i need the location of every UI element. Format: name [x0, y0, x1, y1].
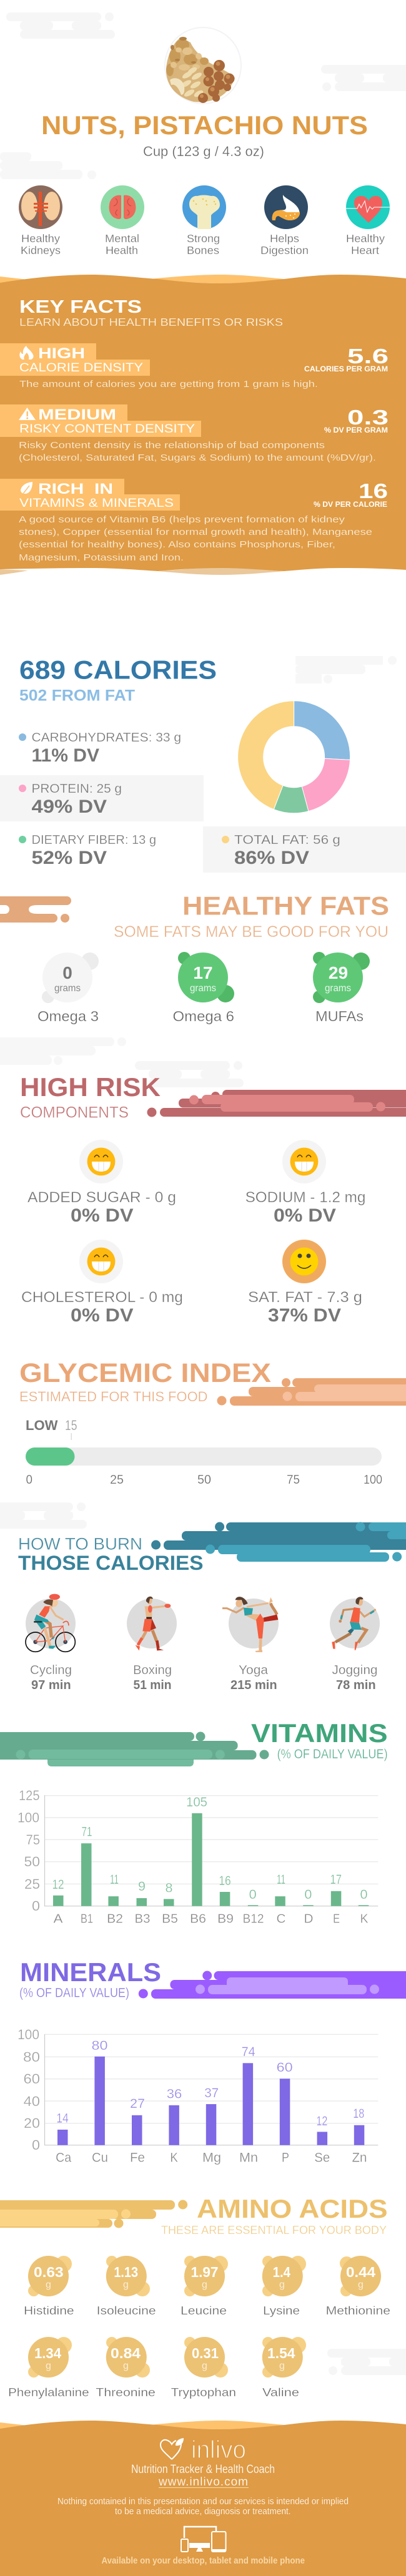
item: sodium: 0% DV — [274, 1205, 336, 1226]
amino: phenylalanine: g — [46, 2361, 51, 2371]
panel: footer — [0, 2421, 406, 2576]
benefit labels: Health — [106, 244, 138, 257]
glycemic level — [26, 1418, 77, 1440]
benefit labels — [21, 232, 385, 257]
vitamins bar chart: 11 — [277, 1873, 285, 1887]
benefit labels: Strong — [187, 232, 220, 245]
minerals bar chart: 37 — [204, 2086, 219, 2100]
amino: histidine: Histidine — [24, 2304, 74, 2317]
healthy fats heading: HEALTHY FATS — [182, 891, 389, 921]
fact: medium risky content density: (Cholesterol, Saturated Fat, Sugars & Sodium) to the amount (%DV/gr). — [19, 453, 376, 463]
minerals bar chart: 40 — [24, 2094, 40, 2109]
vitamins bar chart: K — [360, 1912, 369, 1926]
stat: omega 3: grams — [54, 983, 81, 994]
amino: tryptophan: Tryptophan — [171, 2386, 236, 2399]
fact: high calorie density: CALORIES PER GRAM — [304, 365, 388, 373]
vitamins bar chart: C — [276, 1912, 286, 1926]
benefit labels: Helps — [270, 232, 299, 245]
amino: leucine: g — [202, 2280, 207, 2290]
benefit labels: Bones — [187, 244, 219, 257]
panel: burn calories — [18, 1522, 406, 1692]
amino: threonine — [96, 2337, 156, 2399]
calories from fat: 502 FROM FAT — [19, 687, 135, 705]
vitamins bar chart: B5 — [162, 1912, 178, 1926]
vitamins bar chart: B12 — [242, 1912, 264, 1926]
disclaimer — [57, 2496, 349, 2517]
amino: threonine: g — [123, 2361, 129, 2371]
amino: tryptophan: g — [202, 2361, 207, 2371]
fact: medium risky content density — [0, 404, 389, 463]
vitamins bar chart: 100 — [17, 1810, 39, 1825]
amino: isoleucine: 1.13 — [114, 2264, 138, 2280]
icon: bone — [182, 185, 226, 229]
amino: tryptophan: 0.31 — [192, 2345, 219, 2361]
amino: methionine: Methionine — [326, 2304, 390, 2317]
activity labels: Boxing — [133, 1663, 172, 1677]
icon: stomach — [264, 185, 308, 229]
amino: valine: g — [279, 2361, 285, 2371]
calories heading: 689 CALORIES — [19, 655, 217, 684]
amino: methionine — [326, 2256, 390, 2317]
minerals bar chart: K — [170, 2150, 178, 2165]
figure: boxing — [127, 1597, 177, 1650]
item: added sugar: 0% DV — [71, 1205, 134, 1226]
stat: omega 3 — [37, 953, 99, 1024]
vitamins bar chart: 105 — [186, 1795, 207, 1810]
stat: mufas — [313, 952, 370, 1024]
fact: rich in vitamins and minerals: A good source of Vitamin B6 (helps prevent formation of kidney — [19, 514, 345, 525]
activity labels: 97 min — [31, 1678, 71, 1692]
figure: jogging — [330, 1597, 380, 1650]
vitamins bar chart: 12 — [52, 1878, 64, 1892]
gauge axis: 25 — [110, 1473, 124, 1487]
amino: methionine: 0.44 — [346, 2264, 375, 2280]
legend: carbohydrates: 11% DV — [31, 745, 99, 766]
minerals subheading: (% OF DAILY VALUE) — [19, 1986, 129, 2000]
stat: omega 6: Omega 6 — [172, 1008, 234, 1024]
stat: omega 3: 0 — [62, 963, 72, 982]
item: saturated fat: 37% DV — [268, 1305, 341, 1326]
gauge bar — [26, 1447, 382, 1466]
panel: high risk — [20, 1072, 406, 1326]
item: added sugar — [27, 1140, 176, 1226]
amino heading: AMINO ACIDS — [197, 2194, 388, 2223]
icon: devices — [181, 2527, 226, 2552]
amino: isoleucine: g — [123, 2280, 129, 2290]
healthy fats subheading: SOME FATS MAY BE GOOD FOR YOU — [114, 923, 389, 941]
gauge axis: 50 — [197, 1473, 211, 1487]
vitamins subheading: (% OF DAILY VALUE) — [277, 1747, 388, 1761]
minerals bar chart: 18 — [353, 2107, 364, 2121]
amino: lysine: Lysine — [263, 2304, 300, 2317]
activity labels: 78 min — [336, 1678, 376, 1692]
stat: mufas: MUFAs — [315, 1008, 364, 1024]
title: NUTS, PISTACHIO NUTS — [41, 110, 368, 140]
vitamins bar chart: E — [333, 1912, 340, 1926]
legend: carbohydrates — [19, 731, 181, 766]
website: www.inlivo.com — [158, 2476, 248, 2489]
donut chart — [238, 701, 350, 813]
logo: inlivo — [161, 2436, 246, 2464]
legend: carbohydrates: CARBOHYDRATES: 33 g — [31, 731, 181, 745]
item: saturated fat: SAT. FAT - 7.3 g — [248, 1289, 362, 1306]
gauge axis: 75 — [287, 1473, 300, 1487]
glycemic heading: GLYCEMIC INDEX — [19, 1358, 271, 1388]
amino: threonine: Threonine — [96, 2386, 156, 2399]
fact: rich in vitamins and minerals — [0, 479, 388, 563]
panel: key facts — [0, 275, 406, 575]
item: saturated fat — [248, 1240, 362, 1326]
benefit labels: Healthy — [346, 232, 385, 245]
amino: leucine: 1.97 — [191, 2264, 219, 2280]
amino: valine — [262, 2337, 306, 2399]
fact: rich in vitamins and minerals: (essential for healthy bones). Also contains Phosphorus, Fiber, — [19, 539, 335, 550]
amino: leucine — [181, 2256, 228, 2317]
amino subheading: THESE ARE ESSENTIAL FOR YOUR BODY — [161, 2223, 387, 2236]
vitamins bar chart: D — [304, 1912, 314, 1926]
icon: heart — [346, 185, 390, 229]
minerals bar chart: P — [282, 2150, 289, 2165]
vitamins bar chart: 16 — [219, 1874, 231, 1888]
minerals bar chart: 14 — [56, 2112, 69, 2126]
legend: dietary fiber — [19, 833, 156, 868]
vitamins heading: VITAMINS — [251, 1718, 388, 1748]
amino: histidine: 0.63 — [34, 2264, 64, 2280]
minerals bar chart: 80 — [23, 2049, 40, 2065]
health benefits row — [19, 185, 390, 257]
legend: total fat: TOTAL FAT: 56 g — [234, 833, 340, 847]
fact: high calorie density: HIGH — [38, 345, 85, 362]
gauge axis: 0 — [26, 1473, 32, 1487]
figure: yoga — [222, 1597, 279, 1652]
vitamins bar chart: 0 — [304, 1888, 312, 1902]
panel: amino acids — [0, 2194, 406, 2399]
vitamins bar chart: 50 — [24, 1854, 40, 1869]
vitamins bar chart: 11 — [110, 1873, 119, 1887]
fact: rich in vitamins and minerals: stones), Copper (essential for normal growth and health), Manganese — [19, 527, 372, 537]
fact: medium risky content density: Risky Content density is the relationship of bad components — [19, 440, 325, 451]
amino: isoleucine — [97, 2256, 156, 2317]
stat: omega 3: Omega 3 — [37, 1008, 99, 1024]
stat: omega 6: grams — [190, 983, 216, 994]
amino: lysine — [262, 2256, 306, 2317]
item: sodium — [245, 1140, 365, 1226]
fact: rich in vitamins and minerals: 16 — [359, 479, 388, 502]
availability note: Available on your desktop, tablet and mobile phone — [101, 2555, 305, 2566]
benefit labels: Healthy — [21, 232, 60, 245]
amino: histidine: g — [46, 2280, 51, 2290]
panel: glycemic index — [19, 1358, 406, 1487]
amino: methionine: g — [358, 2280, 364, 2290]
icon: warning triangle — [19, 408, 36, 420]
panel: calories — [0, 655, 406, 873]
icon: flame — [19, 346, 34, 360]
legend: protein: 49% DV — [31, 796, 107, 817]
fact: rich in vitamins and minerals: VITAMINS & MINERALS — [19, 497, 174, 510]
panel: vitamins — [0, 1718, 388, 1926]
legend: dietary fiber: DIETARY FIBER: 13 g — [31, 833, 156, 847]
minerals bar chart: 20 — [24, 2115, 40, 2131]
stat: omega 6 — [172, 952, 234, 1024]
vitamins bar chart — [17, 1788, 378, 1926]
fact: high calorie density: 5.6 — [347, 345, 389, 368]
food image: mixed nuts — [165, 27, 241, 104]
vitamins bar chart: 0 — [249, 1888, 257, 1902]
item: cholesterol: CHOLESTEROL - 0 mg — [21, 1289, 183, 1306]
logo: inlivo: inlivo — [191, 2436, 246, 2464]
fact: rich in vitamins and minerals: Magnesium, Potassium and Iron. — [19, 552, 184, 563]
amino: histidine — [24, 2256, 74, 2317]
minerals bar chart: Mg — [202, 2150, 221, 2165]
fact: medium risky content density: % DV PER GRAM — [324, 426, 388, 434]
fact: rich in vitamins and minerals: RICH IN — [38, 481, 113, 497]
item: added sugar: ADDED SUGAR - 0 g — [27, 1189, 176, 1206]
benefit labels: Digestion — [260, 244, 309, 257]
item: cholesterol — [21, 1240, 183, 1326]
vitamins bar chart: 17 — [330, 1873, 342, 1887]
activity labels — [30, 1663, 377, 1692]
minerals bar chart: 0 — [32, 2137, 40, 2153]
vitamins bar chart: 0 — [360, 1888, 367, 1902]
minerals bar chart — [17, 2027, 378, 2165]
legend: total fat: 86% DV — [234, 848, 309, 868]
disclaimer: to be a medical advice, diagnosis or treatment. — [115, 2506, 291, 2517]
minerals bar chart: Mn — [239, 2150, 258, 2165]
minerals bar chart: Zn — [352, 2150, 367, 2165]
vitamins bar chart: 9 — [138, 1879, 146, 1894]
panel: minerals — [17, 1957, 406, 2165]
high risk subheading: COMPONENTS — [20, 1104, 129, 1122]
benefit labels: Mental — [105, 232, 139, 245]
benefit labels: Heart — [351, 244, 379, 257]
minerals bar chart: Fe — [130, 2150, 145, 2165]
minerals bar chart: 60 — [277, 2060, 293, 2075]
amino: isoleucine: Isoleucine — [97, 2304, 156, 2317]
high risk heading: HIGH RISK — [20, 1072, 161, 1102]
activity labels: 51 min — [134, 1678, 171, 1692]
minerals bar chart: 36 — [167, 2087, 182, 2102]
minerals bar chart: 60 — [24, 2071, 40, 2087]
amino: phenylalanine: Phenylalanine — [8, 2386, 89, 2399]
minerals bar chart: Se — [314, 2150, 330, 2165]
stat: mufas: 29 — [329, 963, 348, 982]
activity labels: 215 min — [230, 1678, 277, 1692]
legend: protein — [0, 775, 204, 821]
gauge axis — [26, 1473, 382, 1487]
vitamins bar chart: 0 — [32, 1898, 40, 1914]
vitamins bar chart: B2 — [107, 1912, 123, 1926]
benefit labels: Kidneys — [21, 244, 61, 257]
vitamins bar chart: B3 — [135, 1912, 150, 1926]
minerals bar chart: 74 — [242, 2045, 255, 2059]
vitamins bar chart: 71 — [81, 1825, 92, 1839]
minerals bar chart: 12 — [316, 2114, 327, 2128]
disclaimer: Nothing contained in this presentation and our services is intended or implied — [57, 2496, 349, 2507]
burn heading light: HOW TO BURN — [18, 1535, 142, 1554]
icon: kidneys — [19, 185, 62, 229]
legend: dietary fiber: 52% DV — [31, 848, 107, 868]
activity labels: Jogging — [332, 1663, 377, 1677]
amino: phenylalanine — [8, 2337, 89, 2399]
activity labels: Yoga — [239, 1663, 269, 1677]
vitamins bar chart: B1 — [81, 1912, 93, 1926]
fact: rich in vitamins and minerals: % DV PER CALORIE — [314, 500, 387, 509]
vitamins bar chart: 25 — [24, 1876, 40, 1892]
activity labels: Cycling — [30, 1663, 72, 1677]
amino: threonine: 0.84 — [111, 2345, 141, 2361]
minerals bar chart: Cu — [92, 2150, 108, 2165]
key facts subheading: LEARN ABOUT HEALTH BENEFITS OR RISKS — [19, 316, 283, 328]
minerals bar chart: 80 — [91, 2039, 107, 2053]
figure: cycling — [26, 1594, 76, 1652]
amino: lysine: 1.4 — [273, 2264, 290, 2280]
fact: medium risky content density: RISKY CONTENT DENSITY — [19, 423, 195, 436]
vitamins bar chart: B6 — [190, 1912, 206, 1926]
serving size: Cup (123 g / 4.3 oz) — [143, 144, 264, 159]
glycemic subheading: ESTIMATED FOR THIS FOOD — [19, 1389, 207, 1404]
minerals bar chart: Ca — [56, 2150, 71, 2165]
stat: omega 6: 17 — [193, 963, 213, 982]
vitamins bar chart: 8 — [165, 1881, 172, 1896]
burn heading bold: THOSE CALORIES — [18, 1552, 204, 1574]
icon: leaf — [21, 482, 32, 494]
vitamins bar chart: 125 — [19, 1788, 40, 1803]
icon: brain — [101, 185, 144, 229]
amino: lysine: g — [279, 2280, 285, 2290]
fact: high calorie density: CALORIE DENSITY — [19, 361, 143, 375]
legend: protein: PROTEIN: 25 g — [31, 782, 122, 796]
minerals heading: MINERALS — [20, 1957, 161, 1987]
fact: medium risky content density: 0.3 — [347, 406, 389, 429]
amino: valine: Valine — [262, 2386, 299, 2399]
vitamins bar chart: A — [54, 1912, 63, 1926]
vitamins bar chart: 75 — [26, 1832, 40, 1848]
amino: leucine: Leucine — [181, 2304, 227, 2317]
tagline: Nutrition Tracker & Health Coach — [131, 2463, 275, 2476]
amino: phenylalanine: 1.34 — [34, 2345, 61, 2361]
fact: high calorie density: The amount of calories you are getting from 1 gram is high. — [19, 379, 318, 389]
stat: mufas: grams — [325, 983, 351, 994]
legend: total fat — [203, 826, 406, 873]
key facts heading: KEY FACTS — [19, 297, 142, 317]
glycemic level: LOW — [26, 1418, 58, 1433]
vitamins bar chart: B9 — [217, 1912, 234, 1926]
gauge axis: 100 — [364, 1473, 382, 1487]
fact: medium risky content density: MEDIUM — [38, 406, 116, 423]
glycemic level: 15 — [65, 1418, 77, 1433]
minerals bar chart: 27 — [130, 2097, 145, 2111]
item: cholesterol: 0% DV — [71, 1305, 134, 1326]
amino: tryptophan — [171, 2337, 236, 2399]
amino: valine: 1.54 — [267, 2345, 295, 2361]
panel: healthy fats — [0, 891, 389, 1024]
item: sodium: SODIUM - 1.2 mg — [245, 1189, 365, 1206]
minerals bar chart: 100 — [17, 2027, 39, 2042]
fact: high calorie density — [0, 343, 389, 389]
